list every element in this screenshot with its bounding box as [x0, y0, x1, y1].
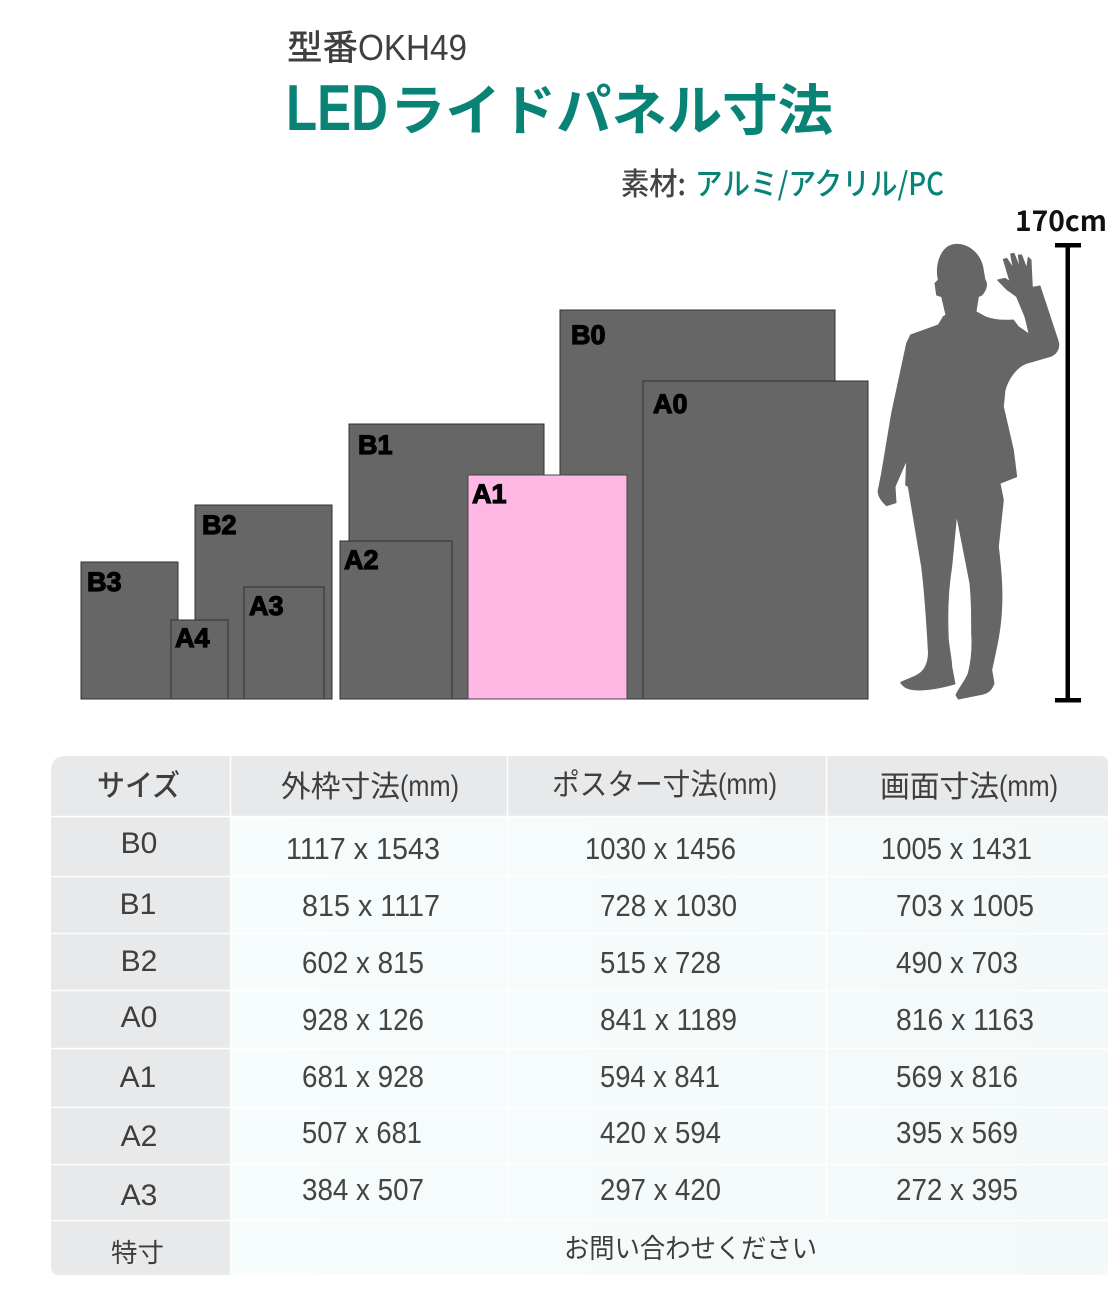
panel: B2 [195, 505, 332, 699]
material line: 素材: [621, 159, 686, 204]
material line: アルミ/アクリル/PC [695, 159, 944, 204]
panel: A1 highlighted: A1 [472, 479, 507, 509]
header: poster: (mm) [718, 768, 777, 801]
height scale bar [1055, 243, 1081, 702]
row A1: 594 x 841 [600, 1059, 720, 1094]
table header background [51, 756, 1108, 816]
row B0: 1117 x 1543 [286, 831, 440, 866]
panel: A0: A0 [653, 389, 688, 419]
row custom size: 特寸 [111, 1233, 164, 1270]
size comparison panels [81, 310, 868, 699]
row B2: 602 x 815 [302, 945, 424, 980]
row A0: 928 x 126 [302, 1002, 424, 1037]
panel: B0: B0 [571, 320, 606, 350]
row A3: A3 [121, 1179, 157, 1212]
row B1: 815 x 1117 [302, 888, 440, 923]
row A1 [120, 1066, 1017, 1088]
row B0 [123, 832, 1031, 860]
row B1: B1 [120, 888, 156, 921]
row A2: 395 x 569 [896, 1115, 1018, 1150]
panel: A3: A3 [249, 591, 284, 621]
row B1 [122, 894, 1033, 916]
header: screen [882, 772, 1056, 802]
model number: 型番 [287, 20, 358, 71]
row B0: 1030 x 1456 [585, 831, 736, 866]
row A1: 569 x 816 [896, 1059, 1018, 1094]
height label: 170cm [1015, 200, 1107, 240]
model number: OKH49 [358, 27, 467, 68]
panel: A0 [643, 381, 868, 699]
row A0: 841 x 1189 [600, 1002, 737, 1037]
header: screen: 画面寸法 [880, 762, 999, 806]
row A2: 420 x 594 [600, 1115, 721, 1150]
panel: B1 [349, 424, 544, 699]
row A2: 507 x 681 [302, 1115, 422, 1150]
panel: A4 [171, 620, 228, 699]
panel: A3 [244, 587, 324, 699]
header: size: サイズ [97, 761, 180, 805]
model number [287, 20, 467, 71]
table label column [51, 816, 230, 1275]
panel: B0 [560, 310, 835, 699]
panel: A1 highlighted [468, 475, 627, 699]
row A3: 272 x 395 [896, 1172, 1018, 1207]
row A3: 384 x 507 [302, 1172, 424, 1207]
row B0: 1005 x 1431 [881, 831, 1032, 866]
header: screen: (mm) [999, 770, 1058, 803]
title: LED [286, 71, 388, 144]
header: poster: ポスター寸法 [552, 760, 718, 804]
row custom size: お問い合わせください [564, 1227, 817, 1266]
title: ライドパネル寸法 [390, 66, 833, 146]
header: poster [554, 769, 776, 800]
row custom size [112, 1234, 815, 1264]
panel: B1: B1 [358, 430, 393, 460]
row B0: B0 [121, 827, 157, 860]
row B2: 490 x 703 [896, 945, 1018, 980]
row A2: A2 [121, 1120, 157, 1153]
panel: B2: B2 [202, 510, 237, 540]
row B2 [123, 950, 1017, 974]
header: outer frame: 外枠寸法 [281, 762, 400, 806]
panel: A2: A2 [344, 545, 379, 575]
panel: B3: B3 [87, 567, 122, 597]
row B2: 515 x 728 [600, 945, 721, 980]
header: outer frame: (mm) [400, 770, 459, 803]
panel: B3 [81, 562, 178, 699]
row B2: B2 [121, 945, 157, 978]
row A3: 297 x 420 [600, 1172, 721, 1207]
row A0: 816 x 1163 [896, 1002, 1034, 1037]
row B1: 703 x 1005 [896, 888, 1034, 923]
row A0: A0 [121, 1001, 157, 1034]
table data area [231, 817, 1108, 1275]
row B1: 728 x 1030 [600, 888, 737, 923]
icon: human silhouette [878, 244, 1059, 699]
size table [51, 756, 1108, 1275]
panel: A2 [340, 541, 452, 699]
row A1: A1 [120, 1061, 156, 1094]
row A1: 681 x 928 [302, 1059, 424, 1094]
row A0 [120, 1006, 1033, 1030]
row A3 [120, 1178, 1017, 1206]
header: outer frame [282, 771, 458, 802]
panel: A4: A4 [175, 623, 210, 653]
row A2 [120, 1122, 1017, 1146]
